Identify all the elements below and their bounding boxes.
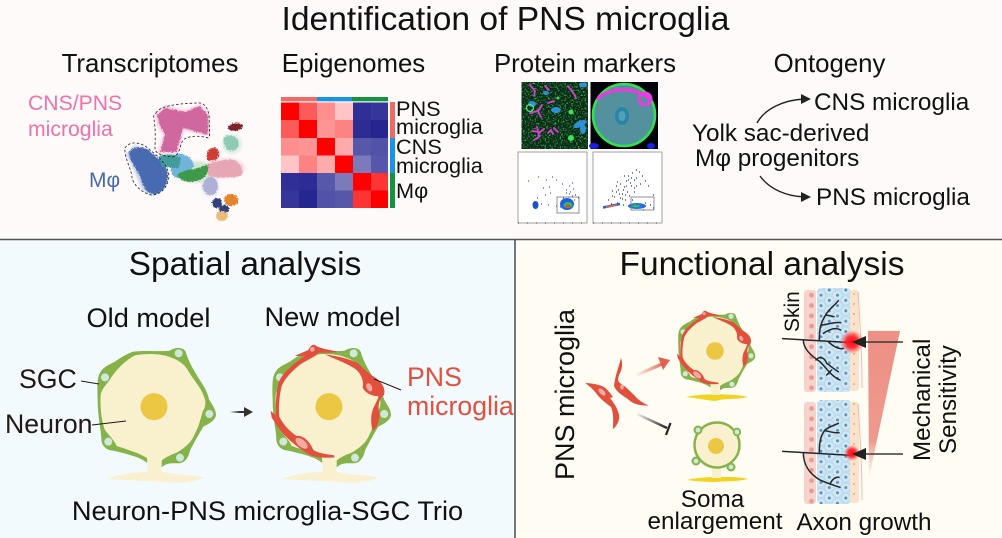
heading: spatial analysis: Spatial analysis xyxy=(129,246,361,283)
inhibition arrow xyxy=(637,414,670,435)
label: CNS/PNS microglia: CNS/PNS xyxy=(28,92,122,115)
label: macrophage: Mφ xyxy=(89,169,120,192)
vertical label: PNS microglia: PNS microglia xyxy=(550,308,580,480)
arrow: stimulus on upper skin xyxy=(852,336,903,348)
heatmap row labels: microglia xyxy=(396,153,484,178)
title: Identification of PNS microglia xyxy=(282,1,730,38)
leader line: neuron xyxy=(92,421,126,425)
label: PNS microglia xyxy=(407,362,514,421)
heatmap row labels: Mφ xyxy=(396,178,428,203)
heading: protein markers: Protein markers xyxy=(494,50,676,78)
arrow: to PNS microglia xyxy=(760,176,811,202)
label: PNS microglia: microglia xyxy=(407,391,514,421)
panel: identification of PNS microglia xyxy=(0,0,1002,239)
panel: functional analysis xyxy=(515,240,1002,538)
heatmap row labels: CNS xyxy=(396,134,442,159)
heading: epigenomes: Epigenomes xyxy=(282,50,425,78)
arrow: promotes soma enlargement xyxy=(637,357,670,375)
label: mechanical sensitivity: Mechanical xyxy=(909,339,936,461)
text: yolk sac-derived progenitors xyxy=(692,120,869,172)
image: microscopy of neuron wrapped by microglia xyxy=(589,82,658,149)
chart: flow cytometry plot 1 xyxy=(518,152,587,223)
chart: correlation heatmap xyxy=(281,97,395,208)
dividers xyxy=(0,240,1002,538)
text: PNS microglia: PNS microglia xyxy=(816,184,970,211)
diagram: skin with dense innervation xyxy=(783,288,864,392)
arrow: stimulus on lower skin xyxy=(852,448,903,460)
heatmap row labels: microglia xyxy=(396,114,484,139)
label: axon growth: Axon growth xyxy=(796,509,932,536)
diagram: old model neuron xyxy=(97,348,216,483)
label: soma enlargement: enlargement xyxy=(647,508,783,535)
text: CNS microglia: CNS microglia xyxy=(814,89,970,116)
label: soma enlargement: Soma xyxy=(681,486,745,513)
label: neuron: Neuron xyxy=(5,409,93,439)
text: yolk sac-derived progenitors: Mφ progenitors xyxy=(695,145,859,172)
diagram: enlarged neuron with microglia xyxy=(677,311,755,401)
heatmap row labels xyxy=(396,96,484,203)
panel: spatial analysis xyxy=(0,240,515,538)
arrow: old to new model xyxy=(230,407,253,417)
label: soma enlargement xyxy=(647,486,783,535)
label: CNS/PNS microglia: microglia xyxy=(28,118,113,141)
label: SGC: SGC xyxy=(19,364,77,394)
chart: single-cell UMAP clusters xyxy=(125,103,245,221)
heading: new model: New model xyxy=(264,301,400,332)
chart: flow cytometry plot 2 xyxy=(593,152,662,223)
heatmap row labels: PNS xyxy=(396,96,441,121)
arrow: to CNS microglia xyxy=(757,94,811,123)
diagram: new model neuron with PNS microglia xyxy=(271,345,391,483)
heading: transcriptomes: Transcriptomes xyxy=(62,50,238,78)
diagram: skin with reduced innervation xyxy=(783,400,862,504)
heading: functional analysis: Functional analysis xyxy=(620,246,904,283)
caption: trio: Neuron-PNS microglia-SGC Trio xyxy=(72,495,463,526)
leader line: SGC xyxy=(81,381,99,384)
text: yolk sac-derived progenitors: Yolk sac-derived xyxy=(692,120,869,147)
label: mechanical sensitivity: Sensitivity xyxy=(935,344,962,454)
image: microscopy field with microglia xyxy=(522,82,588,149)
label: PNS microglia: PNS xyxy=(407,362,462,392)
label: mechanical sensitivity xyxy=(909,339,962,461)
heading: ontogeny: Ontogeny xyxy=(774,50,886,78)
label: CNS/PNS microglia xyxy=(28,92,122,141)
icon: PNS microglia cells xyxy=(585,358,649,429)
label: skin: Skin xyxy=(781,291,804,332)
leader line: PNS microglia xyxy=(374,379,401,390)
chart: mechanical sensitivity wedge xyxy=(868,331,900,478)
diagram: small neuron xyxy=(687,422,748,482)
heading: old model: Old model xyxy=(87,302,210,333)
